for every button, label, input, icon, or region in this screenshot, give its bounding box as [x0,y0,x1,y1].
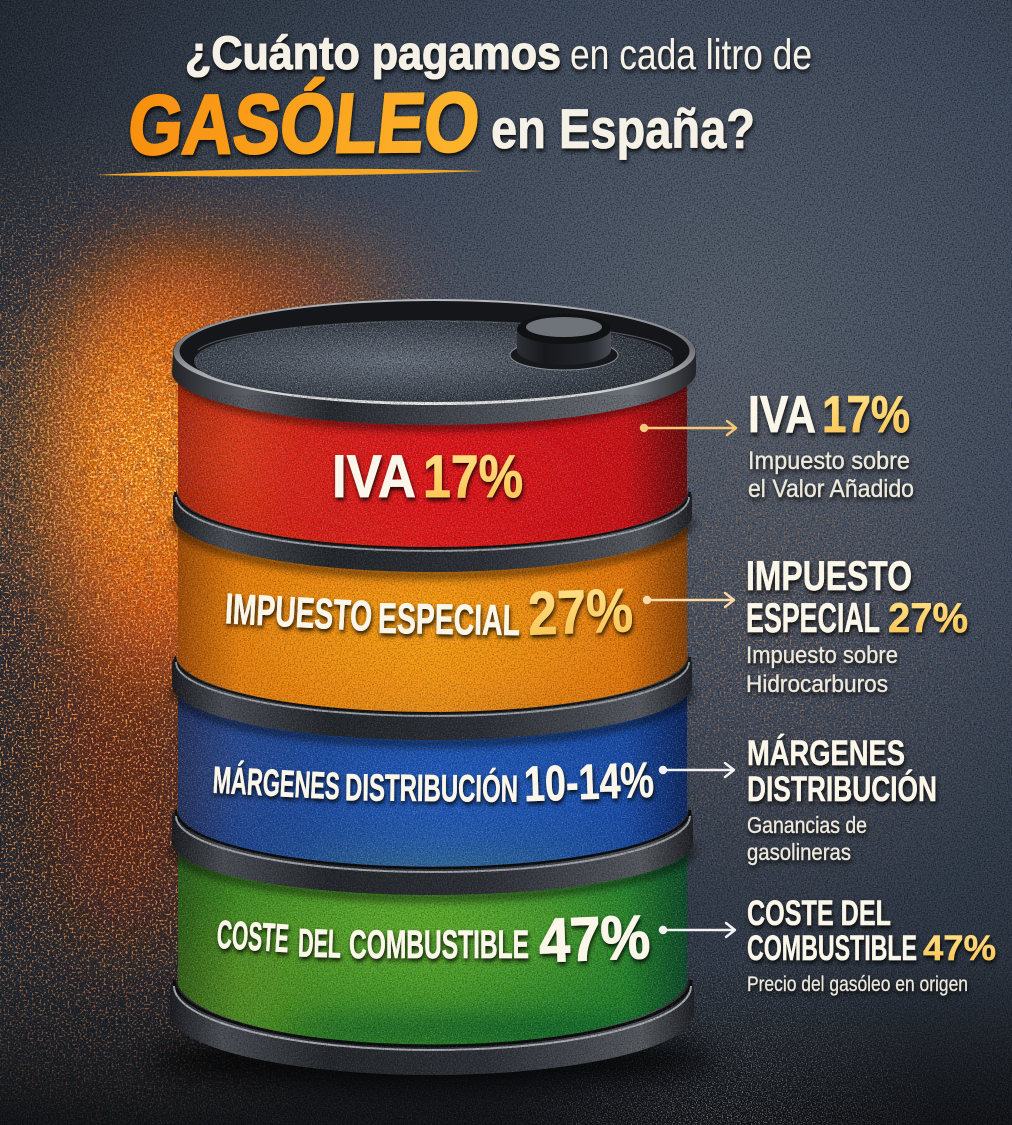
top rim [172,299,696,425]
side label: márgenes: Ganancias de [747,812,867,838]
top lid [194,320,674,402]
band lighting and texture [170,370,700,1070]
title line 2: en España? [491,97,755,160]
barrel label: impuesto especial: 27% [527,576,634,649]
side label: coste: 47% [923,929,996,968]
barrel label: márgenes [212,752,655,812]
side labels [746,386,996,996]
side label: coste: COSTE DEL [747,894,891,933]
ring 1 [173,490,692,572]
title [124,26,812,172]
cap [510,314,618,370]
title keyword: gasóleo: GASÓLEO [124,75,484,172]
side label: IVA: el Valor Añadido [748,475,914,503]
barrel label: coste: COMBUSTIBLE [349,923,529,967]
barrel label: coste [216,903,651,976]
title line 1 [185,26,812,79]
band: IVA (red) [178,370,687,552]
arrows [641,421,736,937]
side label: impuesto especial: IMPUESTO [746,552,912,599]
barrel label: coste: 47% [538,903,651,976]
side label: impuesto especial: 27% [888,594,968,641]
barrel label: coste: COSTE [216,913,290,961]
side label: IVA: IVA [748,386,816,444]
title underline [95,169,486,176]
side label: IVA [748,386,914,503]
ring 3 [172,808,693,895]
arrow: márgenes [660,763,734,777]
side label: márgenes: MÁRGENES [747,733,905,773]
barrel label: márgenes: DISTRIBUCIÓN [345,765,518,811]
side label: márgenes: DISTRIBUCIÓN [747,769,937,809]
side label: impuesto especial: ESPECIAL [746,594,880,641]
orange glow [50,260,380,940]
barrel label: IVA: IVA [332,443,416,510]
barrel [148,299,718,1088]
band: coste del combustible (green) [178,835,687,1050]
band: márgenes distribución (blue) [178,680,687,873]
arrow: impuesto [644,593,734,607]
barrel shadow [148,1032,718,1088]
band: impuesto especial (orange) [178,510,687,718]
ring metal texture [165,395,705,1085]
side label: IVA: 17% [822,386,910,444]
barrel label: impuesto especial: ESPECIAL [378,595,520,645]
barrel labels [212,443,655,976]
side label: impuesto especial [746,552,968,698]
title line 1: en cada litro de [570,31,812,79]
side label: IVA: Impuesto sobre [748,447,910,475]
title line 1: ¿Cuánto pagamos [185,26,561,79]
ring 2 [172,655,692,740]
arrow: IVA [641,421,736,435]
side label: márgenes [747,733,937,865]
side label: impuesto especial: Hidrocarburos [746,671,888,698]
ring 4 [170,977,694,1075]
barrel label: márgenes: 10-14% [523,752,655,812]
side label: coste: COMBUSTIBLE [747,929,917,968]
ring shadows [172,373,693,898]
barrel label: IVA: 17% [423,443,523,510]
side label: impuesto especial: Impuesto sobre [746,642,898,669]
barrel label: coste: DEL [297,921,342,967]
side label: coste: Precio del gasóleo en origen [747,973,968,996]
arrow: coste [660,923,735,937]
side label: coste [747,894,996,996]
barrel label: impuesto especial [224,576,634,649]
side label: márgenes: gasolineras [747,839,851,865]
barrel label: márgenes: MÁRGENES [212,758,341,808]
barrel label: impuesto especial: IMPUESTO [224,585,373,641]
